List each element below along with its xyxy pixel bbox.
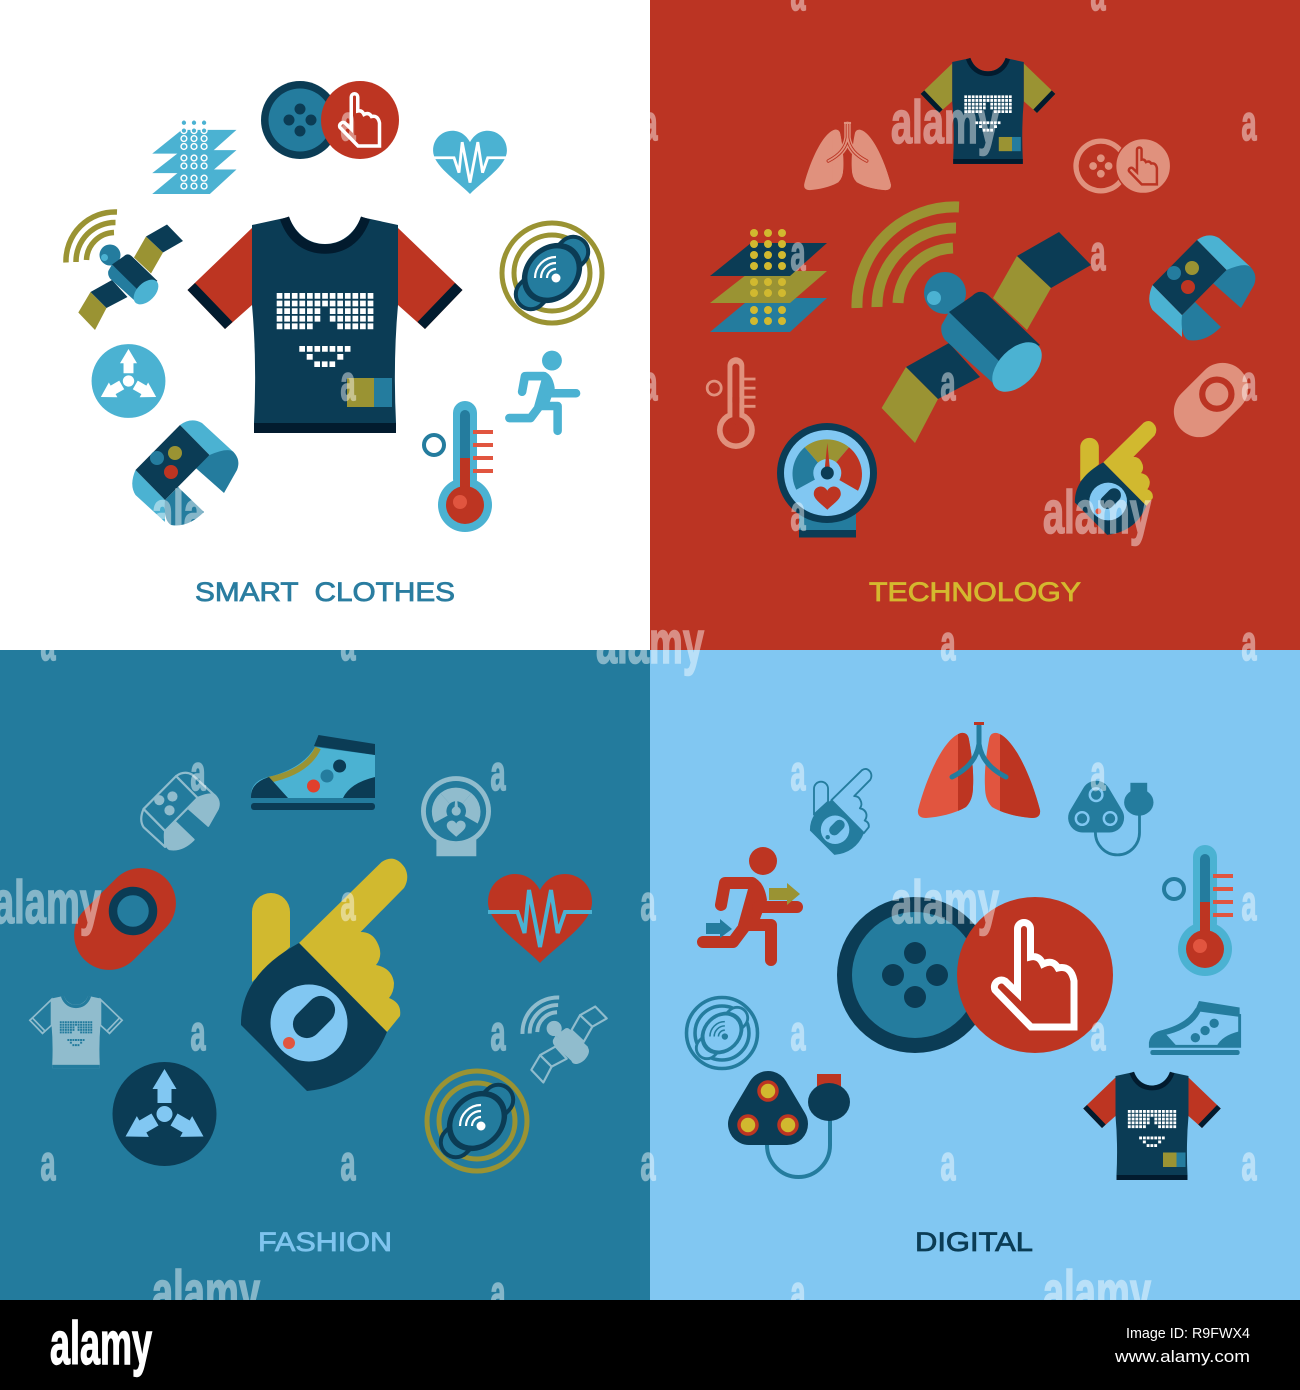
icon: t-shirt [921, 58, 1055, 164]
icon: bracelet [1149, 235, 1255, 340]
icon: arrows circle [92, 344, 165, 418]
heading: smart clothes: SMART CLOTHES [195, 577, 455, 607]
icon: heart gauge [421, 776, 491, 856]
icon: sneaker [251, 735, 375, 810]
icon: lungs [804, 122, 891, 190]
watermarks: a [790, 1005, 806, 1061]
watermarks: a [940, 615, 956, 671]
icon: lungs [918, 722, 1040, 818]
watermarks: alamy [596, 609, 704, 676]
watermarks: a [1241, 615, 1257, 671]
watermarks: alamy [152, 1259, 260, 1326]
icon: button with touch hand [837, 897, 1113, 1053]
watermarks: a [1241, 355, 1257, 411]
icon: t-shirt [30, 996, 122, 1068]
watermarks: a [790, 1265, 806, 1321]
icon: satellite [857, 207, 1091, 443]
icon: electrode device [739, 1074, 850, 1177]
watermarks: a [790, 745, 806, 801]
icon: smart t-shirt [188, 217, 462, 433]
watermarks: a [490, 1265, 506, 1321]
icon: bracelet [132, 420, 238, 525]
watermarks: alamy [891, 869, 999, 936]
watermarks: a [1090, 745, 1106, 801]
watermarks: a [190, 1005, 206, 1061]
icon: electrode device [1076, 783, 1154, 855]
watermarks: a [40, 1135, 56, 1191]
heading: fashion: FASHION [258, 1227, 392, 1257]
icon: capsule sensor [1163, 352, 1259, 448]
watermarks: a [40, 615, 56, 671]
icon: runner with arrows [703, 847, 800, 960]
heading: digital: DIGITAL [915, 1227, 1033, 1257]
icon: pointing hand with device [241, 859, 407, 1091]
icon: heart pulse [433, 131, 507, 194]
footer bar [0, 1300, 1300, 1390]
icon: button with touch hand [1073, 139, 1171, 193]
icon: heart gauge [777, 423, 877, 538]
watermarks: alamy [891, 89, 999, 156]
watermarks: a [1241, 95, 1257, 151]
panel: smart clothes [0, 0, 650, 650]
panel: digital [650, 650, 1300, 1300]
watermarks: a [640, 875, 656, 931]
icon: fabric layers [710, 229, 827, 332]
panel: fashion [0, 650, 650, 1300]
watermarks: a [1090, 225, 1106, 281]
watermarks: a [340, 1135, 356, 1191]
watermarks: a [940, 1135, 956, 1191]
icon: satellite [522, 997, 607, 1082]
icon: thermometer [424, 401, 493, 532]
icon: wearable band in rings [425, 1069, 529, 1173]
icon: t-shirt [1083, 1072, 1221, 1180]
icon: fabric layers [152, 120, 236, 194]
watermarks: a [640, 1135, 656, 1191]
icon: capsule sensor [60, 854, 190, 984]
watermarks: a [490, 1005, 506, 1061]
icon: button with touch hand [261, 81, 399, 159]
watermarks: alamy [152, 479, 260, 546]
watermarks: alamy [1043, 1259, 1151, 1326]
heading: technology: TECHNOLOGY [869, 577, 1081, 607]
icon: thermometer [1164, 845, 1233, 976]
icon: pointing hand with device [810, 769, 871, 855]
image id: Image ID: R9FWX4 [1126, 1325, 1250, 1342]
watermarks: a [642, 355, 658, 411]
icon: sneaker [1150, 1001, 1240, 1055]
icon: pointing hand with device [1075, 421, 1156, 535]
watermarks: alamy [1043, 479, 1151, 546]
icon: bracelet [141, 773, 219, 849]
website: www.alamy.com [1114, 1347, 1250, 1366]
footer logo: alamy [50, 1311, 152, 1377]
watermarks: a [340, 875, 356, 931]
watermarks: a [790, 485, 806, 541]
watermarks: a [642, 95, 658, 151]
watermarks: a [1241, 875, 1257, 931]
panel: technology [650, 0, 1300, 650]
watermarks: a [1241, 1135, 1257, 1191]
watermarks: a [940, 355, 956, 411]
watermarks: a [340, 355, 356, 411]
icon: wearable band in rings [500, 221, 604, 325]
icon: satellite [66, 212, 183, 330]
icon: runner [509, 351, 576, 431]
icon: thermometer [707, 357, 756, 449]
icon: wearable band in rings [685, 996, 759, 1070]
watermarks: a [790, 225, 806, 281]
watermarks: a [490, 745, 506, 801]
icon: heart pulse [488, 874, 592, 963]
watermarks: a [340, 95, 356, 151]
watermarks: a [190, 745, 206, 801]
watermarks: a [1090, 1005, 1106, 1061]
watermarks: a [340, 615, 356, 671]
icon: arrows circle [112, 1062, 216, 1166]
